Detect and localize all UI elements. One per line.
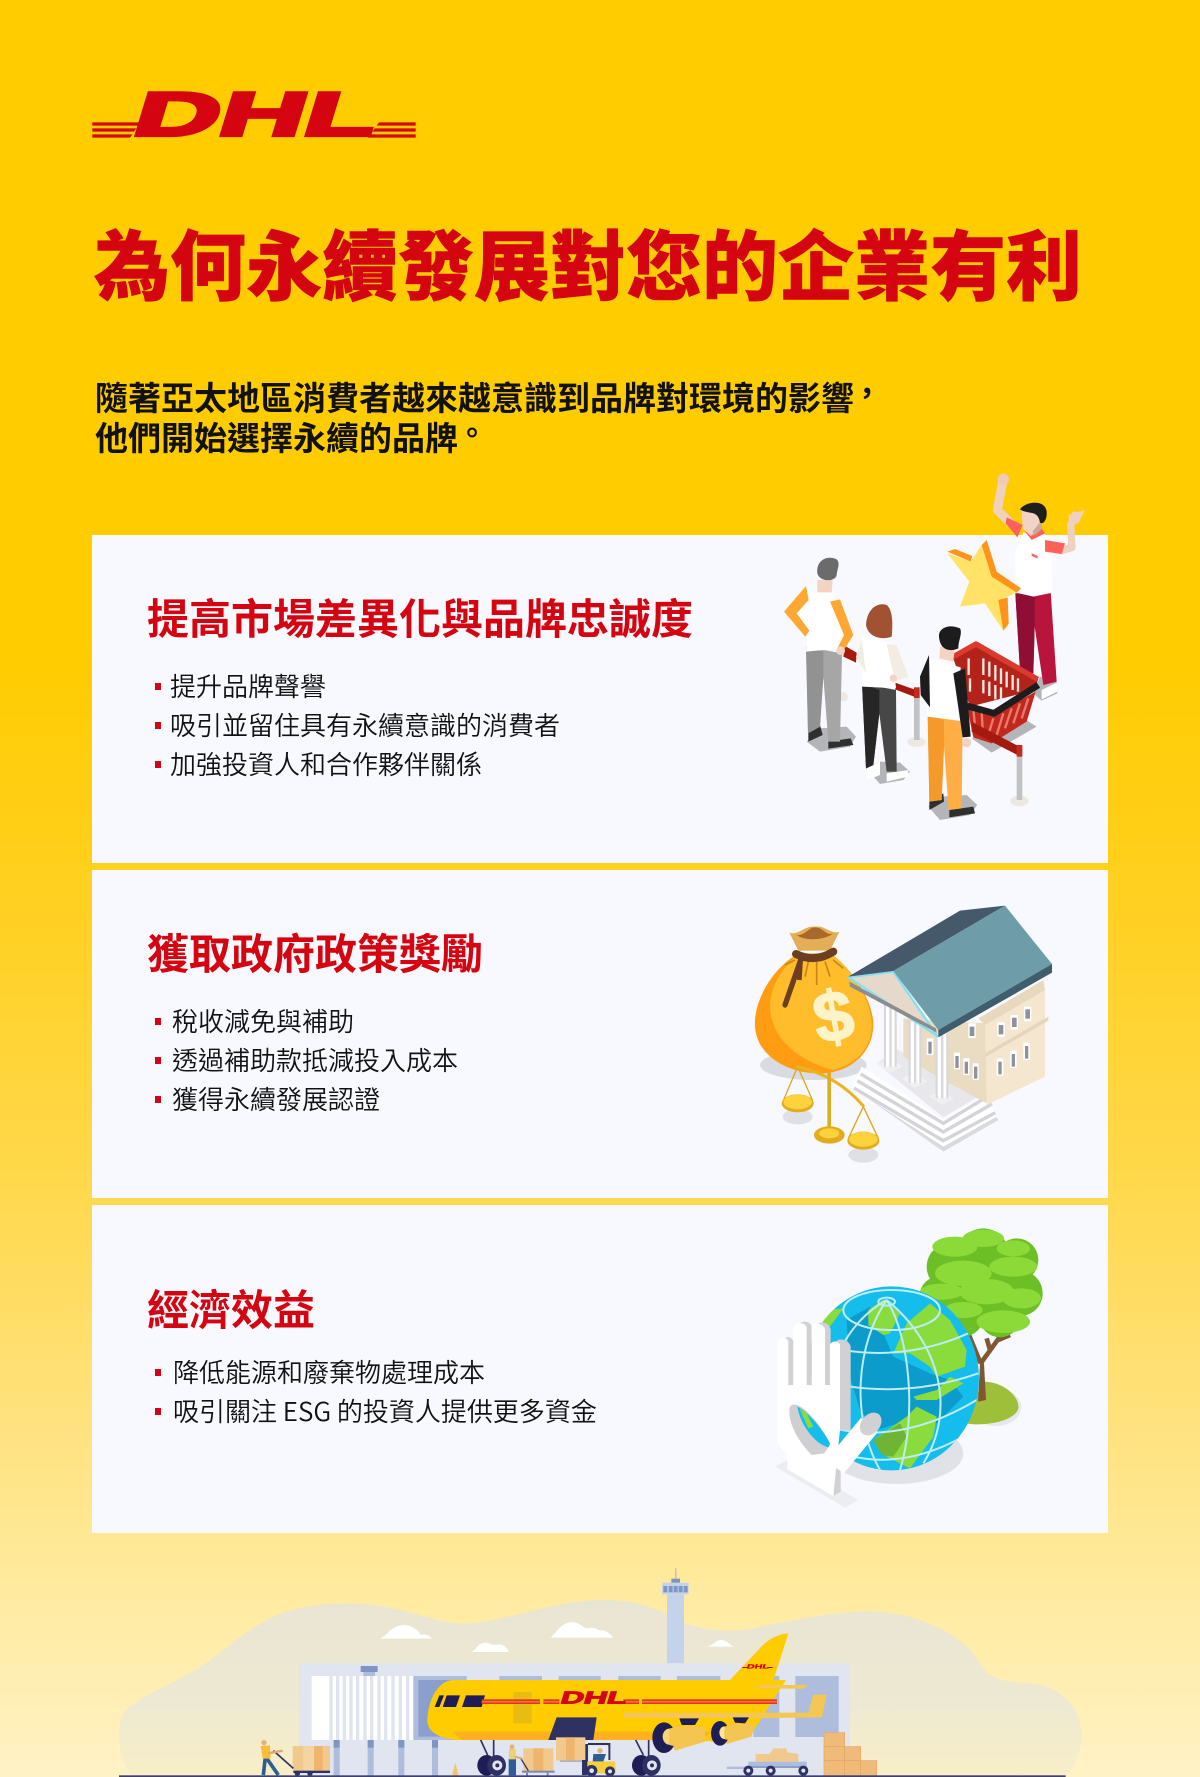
heading: market differentiation: 提高市場差異化與品牌忠誠度 <box>147 586 693 646</box>
landing gear <box>477 1740 661 1776</box>
heading: economic benefits: 經濟效益 <box>147 1276 315 1338</box>
bullet list: market differentiation: 吸引並留住具有永續意識的消費者 <box>170 706 560 742</box>
left worker with pallet jack <box>261 1740 330 1776</box>
bullet list: market differentiation <box>155 666 560 782</box>
clouds <box>380 1622 733 1652</box>
bullet list: government incentives: 透過補助款抵減投入成本 <box>172 1041 458 1078</box>
basket <box>953 643 1038 707</box>
globe base shadow <box>830 1423 963 1484</box>
roof <box>848 972 937 1036</box>
bullet list: government incentives <box>155 1002 458 1117</box>
fuselage stripes <box>482 1699 777 1704</box>
cone <box>452 1763 459 1775</box>
title: 為何永續發展對您的企業有利 <box>94 206 1082 316</box>
stairs <box>852 1077 998 1152</box>
panel: government incentives <box>92 870 1108 1198</box>
background cloud shape <box>119 1600 1082 1776</box>
illustration: shoppers queueing with basket and star <box>784 474 1085 820</box>
hangar <box>299 1663 850 1776</box>
scales front <box>783 1067 878 1138</box>
bullet list: economic benefits: 降低能源和廢棄物處理成本 <box>173 1353 485 1390</box>
aeroplane: DHL <box>746 1663 771 1670</box>
scales shadow <box>783 1109 813 1124</box>
building <box>903 1018 987 1103</box>
woman <box>867 762 880 780</box>
rear man <box>997 478 1011 523</box>
engines <box>663 1727 705 1751</box>
star <box>947 545 1017 631</box>
aeroplane: DHL <box>558 1688 630 1708</box>
illustration: money bag, scales and government building <box>754 906 1052 1162</box>
bullet list: economic benefits: 吸引關注 ESG 的投資人提供更多資金 <box>173 1392 597 1429</box>
panel: economic benefits <box>92 1205 1108 1533</box>
forklift <box>556 1737 616 1776</box>
cockpit windows <box>435 1695 485 1707</box>
tail stabiliser and fin <box>729 1633 788 1681</box>
illustration: globe, hand and tree <box>776 1228 1043 1508</box>
columns <box>877 1058 954 1105</box>
hand <box>775 1459 858 1508</box>
man with black sleeves <box>929 793 944 810</box>
ground island <box>971 1389 1021 1426</box>
baggage cart <box>727 1748 808 1776</box>
money bag <box>755 953 873 1073</box>
intro text: 他們開始選擇永續的品牌。 <box>95 408 487 460</box>
intro text <box>95 369 882 460</box>
control tower <box>662 1568 689 1663</box>
logo: DHL: DHL <box>125 80 389 149</box>
bullet list: market differentiation: 加強投資人和合作夥伴關係 <box>170 744 482 782</box>
stacked crates <box>824 1733 877 1776</box>
intro text: 隨著亞太地區消費者越來越意識到品牌對環境的影響， <box>95 369 882 420</box>
bullet list: economic benefits <box>155 1353 597 1429</box>
rope back <box>843 646 857 663</box>
globe <box>804 1286 979 1470</box>
bullet list: government incentives: 獲得永續發展認證 <box>172 1080 380 1117</box>
illustration: DHL cargo plane at airport <box>119 1568 1082 1777</box>
bullet list: market differentiation: 提升品牌聲譽 <box>170 666 326 704</box>
ground line <box>119 1775 1066 1777</box>
illustration: money bag, scales and government building: $ <box>807 974 860 1059</box>
tree <box>968 1333 1010 1363</box>
middle worker with boxes <box>509 1744 555 1776</box>
heading: government incentives: 獲取政府政策獎勵 <box>147 920 483 982</box>
aeroplane <box>427 1633 827 1753</box>
man with orange sleeves <box>808 725 823 742</box>
bullet list: government incentives: 稅收減免與補助 <box>172 1002 354 1039</box>
wings <box>623 1695 827 1718</box>
panel: market differentiation <box>92 535 1108 863</box>
